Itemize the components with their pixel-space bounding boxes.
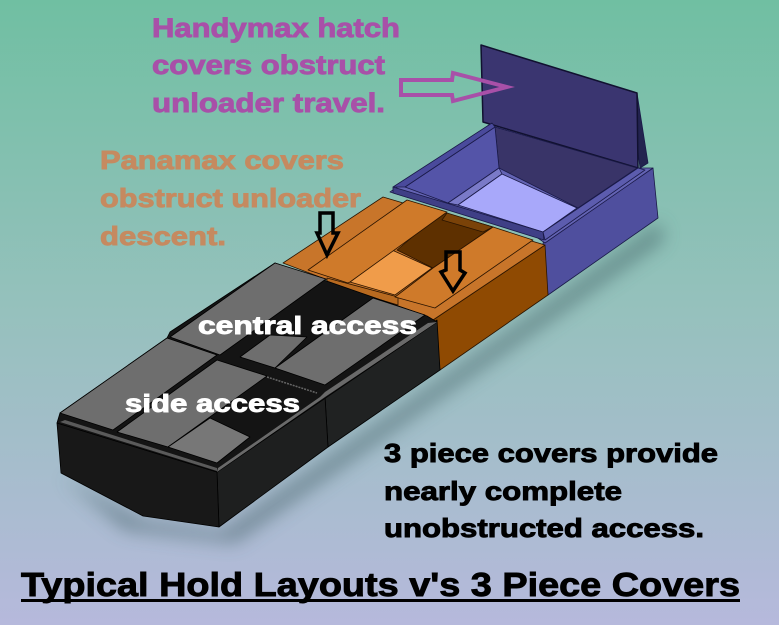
central access cover: middle piece — [240, 335, 307, 368]
3 piece covers note: nearly complete — [384, 476, 622, 506]
Handymax label: unloader travel. — [152, 88, 385, 118]
orange Panamax hold — [283, 197, 548, 370]
raised hatch cover panel — [481, 45, 638, 168]
3 piece covers note: unobstructed access. — [384, 513, 704, 543]
rear section hull side — [325, 320, 440, 447]
under-cover strip — [327, 278, 398, 305]
title: Typical Hold Layouts v's 3 Piece Covers — [21, 566, 740, 603]
lower rear wall — [495, 127, 637, 208]
bow face — [57, 423, 219, 527]
hull side — [433, 245, 548, 370]
Panamax label — [100, 145, 361, 251]
gray deck rim on the side — [217, 322, 437, 472]
Panamax label: descent. — [100, 221, 226, 251]
side access track line — [267, 377, 317, 393]
3 piece covers note: 3 piece covers provide — [384, 438, 718, 468]
front rim — [393, 187, 544, 240]
central access cover: left piece — [170, 263, 326, 355]
Handymax label: covers obstruct — [152, 50, 385, 80]
gray deck rim on the bow — [60, 420, 217, 471]
inner left wall — [405, 127, 499, 203]
Handymax label: Handymax hatch — [152, 13, 400, 43]
hull side — [543, 168, 658, 295]
opening back strip — [442, 213, 493, 232]
right inner edge — [543, 168, 645, 240]
side access label: side access — [125, 390, 300, 418]
Panamax label: Panamax covers — [100, 145, 344, 175]
central access label: central access — [198, 312, 417, 340]
black deck plate — [57, 263, 437, 472]
floor — [458, 174, 577, 232]
deck — [283, 197, 545, 320]
arrow: Panamax descent left — [317, 213, 338, 255]
light hold floor — [350, 250, 432, 295]
raised rear fin — [634, 93, 648, 168]
ledge — [448, 168, 502, 205]
front section hull side — [217, 397, 328, 527]
left cover — [308, 200, 447, 283]
right cover — [395, 227, 533, 308]
purple Handymax hold — [390, 45, 658, 295]
3 piece covers note — [384, 438, 718, 543]
black hull with 3 piece covers — [57, 263, 440, 527]
central access cover: right piece — [275, 298, 425, 385]
deck rim — [390, 123, 653, 243]
Handymax label — [152, 13, 400, 118]
side access cover: left piece — [60, 338, 217, 430]
side access cover: right piece — [168, 418, 250, 463]
arrow: Handymax travel obstruction — [401, 73, 507, 101]
Panamax label: obstruct unloader — [100, 183, 361, 213]
opening — [397, 212, 493, 268]
hull shadow — [62, 222, 664, 543]
side access cover: middle piece — [117, 360, 267, 447]
arrow: Panamax descent right — [441, 252, 465, 291]
